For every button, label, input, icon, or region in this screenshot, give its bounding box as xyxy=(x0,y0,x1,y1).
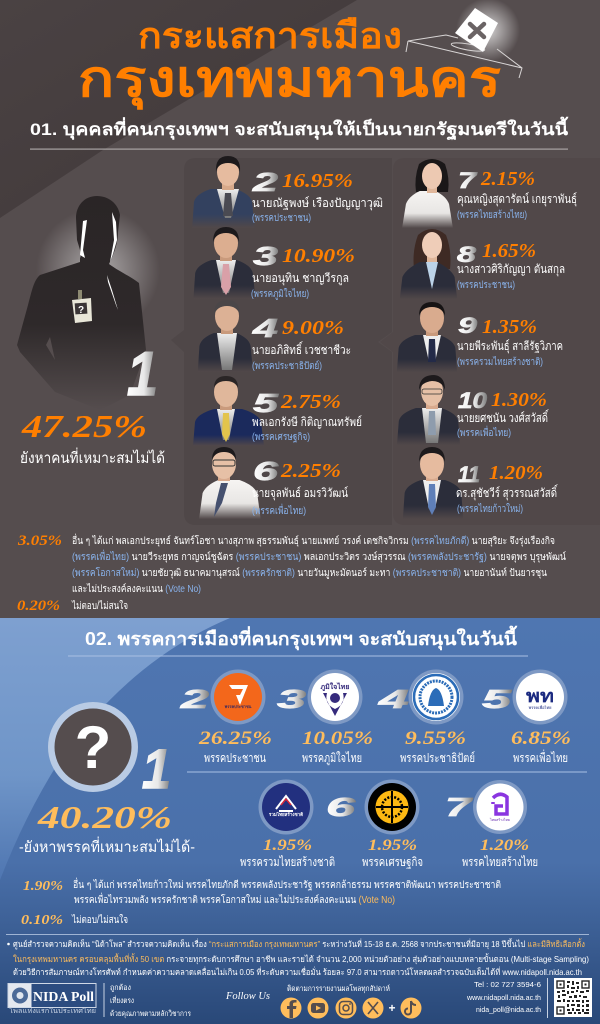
party 4: democrat: 4 xyxy=(377,684,410,714)
follow us: Follow Us xyxy=(225,990,270,1002)
candidate 4: 9.00% xyxy=(282,317,344,339)
rank 1 label: ยังหาคนที่เหมาะสมไม่ได้ xyxy=(20,447,165,467)
icon: youtube xyxy=(308,998,328,1018)
unknown person silhouette xyxy=(17,196,160,410)
logo: NIDA Poll xyxy=(8,984,96,1015)
icon: x xyxy=(362,998,384,1018)
candidate 8: นางสาวศิริกัญญา ตันสกุล xyxy=(457,262,565,277)
contact details: www.nidapoll.nida.ac.th xyxy=(466,993,541,1002)
candidate 8: 1.65% xyxy=(482,240,536,262)
party 2: people's party: พรรคประชาชน xyxy=(224,703,252,709)
others text block: (พรรคเพื่อไทย) นายวีระยุทธ กาญจน์ชูฉัตร (พรรคประชาชน) พลเอกประวิตร วงษ์สุวรรณ (พรรคพลังประชารัฐ) นายจตุพร บุรุษพัฒน์ xyxy=(72,549,566,563)
title: กรุงเทพมหานคร xyxy=(78,51,501,110)
candidate 8: (พรรคประชาชน) xyxy=(457,280,515,291)
candidate 4: (พรรคประชาธิปัตย์) xyxy=(252,360,322,372)
candidate 5: (พรรคเศรษฐกิจ) xyxy=(252,432,310,443)
title: กระแสการเมือง xyxy=(138,15,402,56)
party 5: pheu thai: 6.85% xyxy=(511,728,571,749)
contact details: Tel : 02 727 3594-6 xyxy=(474,980,541,989)
others text block: อื่น ๆ ได้แก่ พลเอกประยุทธ์ จันทร์โอชา นางสุภาพ สุธรรมพันธุ์ นายแพทย์ วรงค์ เดชกิจวิกรม (พรรคไทยภักดี) นายสุริยะ จึงรุ่งเรืองกิจ xyxy=(72,533,555,547)
candidate 9 xyxy=(397,302,563,372)
party: united thai nation: 1.95% xyxy=(263,837,312,854)
candidate 11 xyxy=(403,447,558,519)
candidate 4: 4 xyxy=(251,313,279,343)
other parties text: พรรคเพื่อไทรวมพลัง พรรครักชาติ พรรคโอกาสใหม่ และไม่ประสงค์ลงคะแนน (Vote No) xyxy=(74,892,395,906)
icon: facebook xyxy=(280,998,302,1018)
party 5: pheu thai xyxy=(482,670,571,765)
party 2: people's party: 26.25% xyxy=(198,728,272,749)
candidate 10: (พรรคเพื่อไทย) xyxy=(457,425,511,439)
party 3: bhumjaithai xyxy=(277,670,373,766)
candidate 7 xyxy=(402,159,577,228)
logo: NIDA Poll: โพลแห่งแรกในประเทศไทย xyxy=(9,1007,96,1015)
candidate 9: 9 xyxy=(458,313,478,338)
party 7: thai sang thai: 7 xyxy=(445,792,474,822)
party 3: bhumjaithai: 10.05% xyxy=(302,728,373,749)
candidate 7: (พรรคไทยสร้างไทย) xyxy=(457,209,527,221)
methodology note: ในกรุงเทพมหานคร ครอบคลุมพื้นที่ทั้ง 50 เขต กระจายทุกระดับการศึกษา อาชีพ และรายได้ จำนวน 2,000 หน่วยตัวอย่าง สุ่มตัวอย่างแบบหลายขั้นตอน (Multi-stage Sampling) xyxy=(13,953,589,965)
slogan: เที่ยงตรง xyxy=(110,995,134,1005)
party no answer text: ไม่ตอบ/ไม่สนใจ xyxy=(71,914,128,926)
other parties text: อื่น ๆ ได้แก่ พรรคไทยก้าวใหม่ พรรคไทยภักดี พรรคพลังประชารัฐ พรรคกล้าธรรม พรรคชาติพัฒนา พรรคประชาชาติ xyxy=(73,877,501,891)
party 4: democrat: 9.55% xyxy=(405,728,466,749)
candidate 3: นายอนุทิน ชาญวีรกูล xyxy=(252,271,349,286)
no answer text: ไม่ตอบ/ไม่สนใจ xyxy=(71,600,128,612)
candidate 2: 16.95% xyxy=(282,170,353,192)
background: dark section xyxy=(0,0,600,620)
party 5: pheu thai: พท xyxy=(526,686,554,706)
party 4: democrat: พรรคประชาธิปัตย์ xyxy=(400,751,475,765)
party 2: people's party: พรรคประชาชน xyxy=(204,751,266,765)
methodology note: ศูนย์สำรวจความคิดเห็น “นิด้าโพล” สำรวจความคิดเห็น เรื่อง “กระแสการเมือง กรุงเทพมหานคร” ระหว่างวันที่ 15-18 ธ.ค. 2568 จากประชาชนที่มีอายุ 18 ปีขึ้นไป และมีสิทธิเลือกตั้ง xyxy=(13,938,585,950)
party 6: economic party: พรรคเศรษฐกิจ xyxy=(362,855,423,869)
candidate 2: นายณัฐพงษ์ เรืองปัญญาวุฒิ xyxy=(252,196,383,211)
candidate 6: (พรรคเพื่อไทย) xyxy=(252,503,306,517)
party 3: bhumjaithai: พรรคภูมิใจไทย xyxy=(302,751,362,766)
party 5: pheu thai: พรรคเพื่อไทย xyxy=(513,749,568,765)
party rank 1 xyxy=(19,702,195,856)
background: blue section xyxy=(0,618,600,1024)
icon: ballot box xyxy=(406,0,522,78)
party 7: thai sang thai: พรรคไทยสร้างไทย xyxy=(462,855,538,869)
candidate 11: (พรรคไทยก้าวใหม่) xyxy=(457,503,523,515)
panel: ranks 7-11 xyxy=(380,158,600,525)
others text block: (พรรคโอกาสใหม่) นายชัยวุฒิ ธนาคมานุสรณ์ (พรรครักชาติ) นายวันมูหะมัดนอร์ มะทา (พรรคประชาชาติ) นายอานันท์ ปันยารชุน xyxy=(72,566,547,579)
candidate 9: นายพีระพันธุ์ สาลีรัฐวิภาค xyxy=(457,339,563,354)
party 4: democrat xyxy=(377,670,475,765)
candidate 3: 10.90% xyxy=(282,245,355,267)
party rank 1: 1 xyxy=(142,737,171,800)
party: united thai nation: พรรครวมไทยสร้างชาติ xyxy=(240,855,335,869)
party: united thai nation xyxy=(240,780,335,869)
candidate 4 xyxy=(198,300,351,372)
rank 1 number: 1 xyxy=(127,340,158,409)
icon: instagram xyxy=(336,998,356,1018)
other parties text xyxy=(73,877,501,906)
other parties value 1.90%: 1.90% xyxy=(23,879,63,894)
candidate 11: 11 xyxy=(458,462,480,487)
party rank 1: -ยังหาพรรคที่เหมาะสมไม่ได้- xyxy=(19,836,195,856)
candidate 9: (พรรครวมไทยสร้างชาติ) xyxy=(457,356,543,368)
candidate 10: 10 xyxy=(458,388,488,413)
party 7: thai sang thai: 1.20% xyxy=(480,837,529,854)
candidate 3 xyxy=(193,227,355,300)
party rank 1: 40.20% xyxy=(37,799,172,835)
party 7: thai sang thai xyxy=(445,780,538,869)
party 2: people's party: 2 xyxy=(179,684,210,714)
candidate 5 xyxy=(193,376,362,446)
others text block xyxy=(72,533,566,595)
QR code xyxy=(554,978,592,1017)
candidate 11: 1.20% xyxy=(489,462,543,484)
unknown person silhouette: ? xyxy=(78,305,84,316)
rank 1 value: 47.25% xyxy=(21,408,147,444)
panel: ranks 2-6 xyxy=(171,158,392,525)
candidate 10: 1.30% xyxy=(491,389,547,411)
candidate 8: 8 xyxy=(457,242,477,267)
candidate 7: คุณหญิงสุดารัตน์ เกยุราพันธุ์ xyxy=(457,192,577,207)
candidate 2 xyxy=(192,156,383,228)
background: blue diagonal highlight xyxy=(0,618,230,880)
no answer value 0.20%: 0.20% xyxy=(17,598,60,614)
candidate 9: 1.35% xyxy=(482,316,537,338)
candidate 5: 2.75% xyxy=(280,391,341,413)
candidate 4: นายอภิสิทธิ์ เวชชาชีวะ xyxy=(252,341,351,357)
candidate 6: 6 xyxy=(253,456,279,486)
candidate 2: (พรรคประชาชน) xyxy=(252,213,311,224)
candidate 6: นายจุลพันธ์ อมรวิวัฒน์ xyxy=(252,486,348,501)
party 7: thai sang thai: ไทยสร้างไทย xyxy=(489,817,510,822)
party 6: economic party xyxy=(326,780,423,869)
candidate 5: 5 xyxy=(253,388,279,418)
heading: section 02: 02. พรรคการเมืองที่คนกรุงเทพฯ จะสนับสนุนในวันนี้ xyxy=(85,625,518,651)
follow caption: ติดตามการรายงานผลโพลทุกสัปดาห์ xyxy=(287,984,390,993)
title xyxy=(78,15,501,110)
candidate 7: 7 xyxy=(458,168,479,193)
party 3: bhumjaithai: 3 xyxy=(277,684,307,714)
contact details: nida_poll@nida.ac.th xyxy=(476,1005,541,1014)
slogan: ถูกต้อง xyxy=(110,983,131,992)
others text block: และไม่ประสงค์ลงคะแนน (Vote No) xyxy=(72,583,201,595)
candidate 6: 2.25% xyxy=(280,460,341,482)
party 5: pheu thai: 5 xyxy=(482,684,512,714)
party: united thai nation: รวมไทยสร้างชาติ xyxy=(269,811,303,817)
candidate 10: นายยศชนัน วงศ์สวัสดิ์ xyxy=(457,409,549,425)
candidate 7: 2.15% xyxy=(480,168,535,190)
slogan xyxy=(110,983,191,1018)
heading: section 01: 01. บุคคลที่คนกรุงเทพฯ จะสนับสนุนให้เป็นนายกรัฐมนตรีในวันนี้ xyxy=(30,116,568,141)
party 6: economic party: 1.95% xyxy=(368,837,417,854)
party 6: economic party: 6 xyxy=(326,792,356,822)
slogan: ด้วยคุณภาพตามหลักวิชาการ xyxy=(110,1009,191,1018)
candidate 3: 3 xyxy=(253,241,279,271)
plus sign: + xyxy=(388,1001,396,1015)
logo: NIDA Poll: NIDA Poll xyxy=(33,990,94,1005)
party no answer value 0.10%: 0.10% xyxy=(21,913,63,928)
background: dark diagonal xyxy=(0,0,357,218)
party rank 1: ? xyxy=(75,714,111,781)
contact details xyxy=(466,980,541,1014)
party 5: pheu thai: พรรคเพื่อไทย xyxy=(528,705,552,710)
others value 3.05%: 3.05% xyxy=(17,533,62,549)
party 2: people's party xyxy=(179,670,272,765)
candidate 10 xyxy=(397,375,549,445)
candidate 6 xyxy=(199,447,348,519)
party 3: bhumjaithai: ภูมิใจไทย xyxy=(321,682,349,692)
candidate 11: ดร.สุชัชวีร์ สุวรรณสวัสดิ์ xyxy=(456,484,558,501)
candidate 8 xyxy=(400,229,565,299)
icon: tiktok xyxy=(400,998,422,1018)
methodology note xyxy=(7,938,589,977)
candidate 3: (พรรคภูมิใจไทย) xyxy=(251,288,309,300)
candidate 5: พลเอกรังษี กิติญาณทรัพย์ xyxy=(252,415,362,429)
candidate 2: 2 xyxy=(251,167,279,197)
